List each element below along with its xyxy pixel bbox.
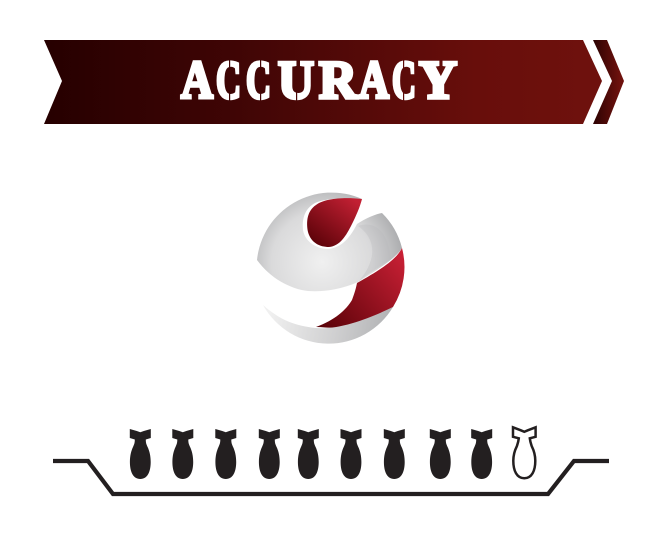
outlined bomb	[513, 427, 536, 478]
title: R	[319, 50, 358, 110]
globe: gray upper body	[257, 193, 402, 291]
title: Y	[419, 50, 457, 110]
banner ribbon	[44, 40, 602, 124]
globe: red top drop	[307, 198, 362, 247]
bomb row: nine of ten filled	[130, 427, 536, 479]
header banner	[44, 40, 624, 124]
double chevron arrow	[593, 40, 624, 124]
globe: gray bottom crescent	[263, 305, 393, 344]
title	[181, 50, 457, 110]
globe logo	[257, 193, 404, 344]
title: U	[278, 50, 314, 110]
title: C	[392, 50, 416, 110]
stencil gaps	[229, 60, 404, 102]
globe: red right band	[316, 248, 404, 328]
title: A	[181, 50, 213, 110]
globe: shaded inner fold	[358, 225, 391, 282]
title: C	[216, 50, 241, 110]
title: A	[359, 50, 389, 110]
filled bombs	[130, 429, 492, 479]
title: C	[246, 50, 271, 110]
bomb crater line	[53, 461, 609, 494]
